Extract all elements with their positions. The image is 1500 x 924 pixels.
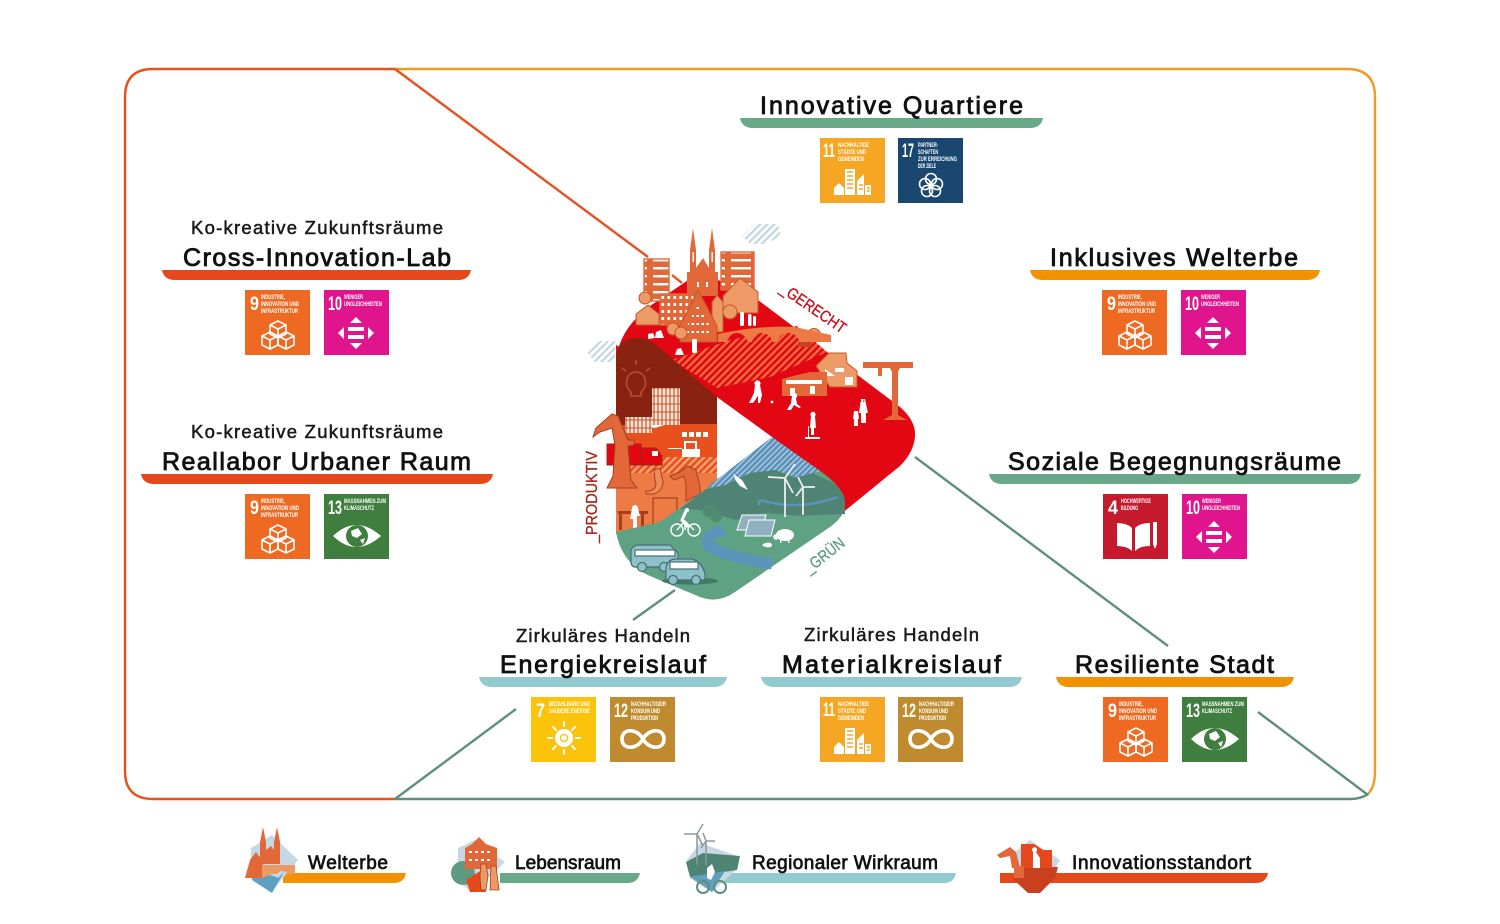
heading bar [479, 677, 727, 687]
SDG 17: PARTNER- [918, 143, 938, 149]
trees [639, 292, 820, 342]
SDG 9: INDUSTRIE, [261, 499, 285, 505]
SDG 11: 11 [823, 141, 835, 162]
heading bar [1056, 677, 1294, 687]
SDG 13 [1182, 697, 1247, 762]
label: produktiv: _PRODUKTIV [584, 451, 601, 544]
SDG 11: STÄDTE UND [838, 708, 866, 715]
trees [702, 504, 722, 522]
label: gruen: _GRÜN [800, 534, 848, 578]
solar panels [737, 515, 775, 536]
SDG 11: 11 [823, 700, 835, 721]
SDG 17 [898, 138, 963, 203]
SDG 9: INNOVATION UND [1118, 302, 1156, 308]
SDG 10: WENIGER [1201, 295, 1220, 301]
shadow [662, 578, 718, 584]
SDG 10 [1181, 290, 1246, 355]
SDG 12 [898, 697, 963, 762]
SDG 9: INDUSTRIE, [1119, 702, 1143, 708]
legend: Welterbe [245, 827, 406, 893]
robot arm [670, 466, 700, 501]
SDG 10: 10 [1185, 294, 1199, 315]
SDG 7: SAUBERE ENERGIE [549, 709, 590, 715]
block: Energiekreislauf [479, 625, 727, 762]
SDG 13: KLIMASCHUTZ [344, 506, 374, 512]
shelf [653, 498, 677, 524]
van [666, 559, 705, 584]
bridge [718, 327, 831, 342]
green segment: gruen [616, 437, 845, 600]
icon: house with people [451, 837, 505, 893]
subheading: Ko-kreative Zukunftsräume [191, 421, 443, 442]
SDG 13: MASSNAHMEN ZUM [344, 499, 386, 505]
red segment: gerecht [616, 272, 915, 523]
crane [863, 362, 913, 420]
SDG 9 [245, 290, 310, 355]
cyclist [671, 508, 700, 536]
heading bar [141, 474, 493, 484]
legend text: Lebensraum [515, 853, 621, 874]
river [707, 497, 838, 564]
truck [607, 444, 662, 465]
hatch clouds [587, 224, 781, 456]
bird [733, 474, 748, 490]
legend bar [720, 873, 956, 883]
SDG 9: INFRASTRUKTUR [1119, 716, 1156, 722]
central illustration [587, 224, 915, 600]
SDG 7 [531, 697, 596, 762]
SDG 11 [820, 697, 885, 762]
heading bar [1030, 270, 1320, 280]
white centre triangle [717, 398, 772, 481]
SDG 17: ZUR ERREICHUNG [918, 157, 957, 163]
SDG 10 [324, 290, 389, 355]
SDG 10: UNGLEICHHEITEN [344, 302, 382, 308]
label: gerecht: _GERECHT [776, 280, 849, 337]
orange segment: produktiv [593, 338, 717, 534]
crane left [593, 414, 637, 488]
SDG 10: UNGLEICHHEITEN [1201, 302, 1239, 308]
connector lines [395, 69, 1368, 799]
SDG 11: GEMEINDEN [838, 157, 864, 163]
legend: Innovationsstandort [997, 840, 1268, 893]
block: Resiliente Stadt [1056, 651, 1294, 762]
subheading: Zirkuläres Handeln [804, 624, 979, 645]
SDG 10: UNGLEICHHEITEN [1202, 506, 1240, 512]
outer frame [125, 69, 1375, 799]
SDG 13: 13 [328, 498, 342, 519]
SDG 9 [1103, 697, 1168, 762]
SDG 12: KONSUM UND [919, 709, 948, 715]
legend bar [1000, 873, 1268, 883]
legend text: Regionaler Wirkraum [752, 853, 938, 874]
SDG 9 [245, 494, 310, 559]
block: Cross-Innovation-Lab [162, 217, 471, 355]
legend bar [500, 873, 640, 883]
heading: Innovative Quartiere [760, 92, 1023, 120]
icon: light bulb [622, 360, 650, 396]
SDG 9: INFRASTRUKTUR [1118, 309, 1155, 315]
SDG 12: NACHHALTIGE/R [631, 702, 666, 708]
SDG 17: SCHAFTEN [918, 150, 938, 156]
old town buildings [636, 228, 831, 355]
SDG 13: MASSNAHMEN ZUM [1202, 702, 1244, 708]
heading bar [740, 118, 1043, 128]
people, scooter [749, 380, 868, 439]
forklift [668, 441, 700, 457]
SDG 11: STÄDTE UND [838, 149, 866, 156]
SDG 10: 10 [1186, 498, 1200, 519]
icon: turbines, landscape, cyclist [684, 824, 740, 893]
SDG 4 [1103, 494, 1168, 559]
sheep [763, 529, 794, 547]
heading: Reallabor Urbaner Raum [162, 448, 471, 476]
SDG 7: 7 [536, 701, 545, 722]
icon: cathedral and bridge [245, 827, 298, 893]
SDG 9 [1102, 290, 1167, 355]
SDG 10 [1182, 494, 1247, 559]
block: Reallabor Urbaner Raum [141, 421, 493, 559]
SDG 17: 17 [902, 141, 914, 162]
SDG 9: INNOVATION UND [261, 302, 299, 308]
legend text: Welterbe [308, 853, 388, 874]
heading: Inklusives Welterbe [1050, 244, 1298, 272]
SDG 9: INDUSTRIE, [1118, 295, 1142, 301]
block: Innovative Quartiere [740, 92, 1043, 203]
block: Inklusives Welterbe [1030, 244, 1320, 355]
subheading: Ko-kreative Zukunftsräume [191, 217, 443, 238]
SDG 12: 12 [614, 701, 628, 722]
SDG 7: BEZAHLBARE UND [549, 702, 590, 708]
legend text: Innovationsstandort [1072, 853, 1252, 874]
heading: Energiekreislauf [500, 651, 706, 679]
icon: factory and robot [997, 840, 1060, 893]
microscope [646, 468, 663, 494]
SDG 17: DER ZIELE [918, 164, 936, 170]
SDG 12: NACHHALTIGE/R [919, 702, 954, 708]
SDG 11 [820, 138, 885, 203]
SDG 9: INDUSTRIE, [261, 295, 285, 301]
SDG 12: KONSUM UND [631, 709, 660, 715]
heading: Resiliente Stadt [1075, 651, 1274, 679]
SDG 9: INNOVATION UND [1119, 709, 1157, 715]
icon: wind turbines [768, 464, 815, 517]
SDG 13: KLIMASCHUTZ [1202, 709, 1232, 715]
heading bar [989, 474, 1361, 484]
SDG 12: PRODUKTION [631, 716, 658, 722]
SDG 9: INFRASTRUKTUR [261, 513, 298, 519]
block: Soziale Begegnungsräume [989, 448, 1361, 559]
SDG 13: 13 [1186, 701, 1200, 722]
subheading: Zirkuläres Handeln [516, 625, 690, 646]
SDG 9: 9 [1108, 701, 1117, 722]
desk worker [618, 505, 648, 530]
factory windows [625, 388, 708, 437]
legend bar [283, 873, 406, 883]
heading: Soziale Begegnungsräume [1008, 448, 1341, 476]
legend: Regionaler Wirkraum [684, 824, 956, 893]
legend: Lebensraum [451, 837, 640, 893]
heading bar [162, 270, 471, 280]
new houses and crane [749, 353, 913, 439]
heading bar [761, 677, 1022, 687]
SDG 9: 9 [1107, 294, 1116, 315]
SDG 12 [610, 697, 675, 762]
SDG 4: HOCHWERTIGE [1121, 499, 1151, 505]
SDG 11: NACHHALTIGE [838, 702, 869, 708]
SDG 12: PRODUKTION [919, 716, 946, 722]
SDG 4: BILDUNG [1121, 506, 1138, 512]
SDG 13 [324, 494, 389, 559]
SDG 4: 4 [1108, 498, 1118, 519]
SDG 9: 9 [250, 498, 259, 519]
SDG 10: 10 [328, 294, 342, 315]
SDG 9: INFRASTRUKTUR [261, 309, 298, 315]
SDG 10: WENIGER [1202, 499, 1221, 505]
people in old town [648, 312, 756, 355]
SDG 9: INNOVATION UND [261, 506, 299, 512]
SDG 10: WENIGER [344, 295, 363, 301]
SDG 9: 9 [250, 294, 259, 315]
block: Materialkreislauf [761, 624, 1022, 762]
bus [631, 545, 678, 572]
SDG 11: GEMEINDEN [838, 716, 864, 722]
heading: Materialkreislauf [782, 651, 1001, 679]
SDG 11: NACHHALTIGE [838, 143, 869, 149]
SDG 12: 12 [902, 701, 916, 722]
heading: Cross-Innovation-Lab [183, 244, 451, 272]
